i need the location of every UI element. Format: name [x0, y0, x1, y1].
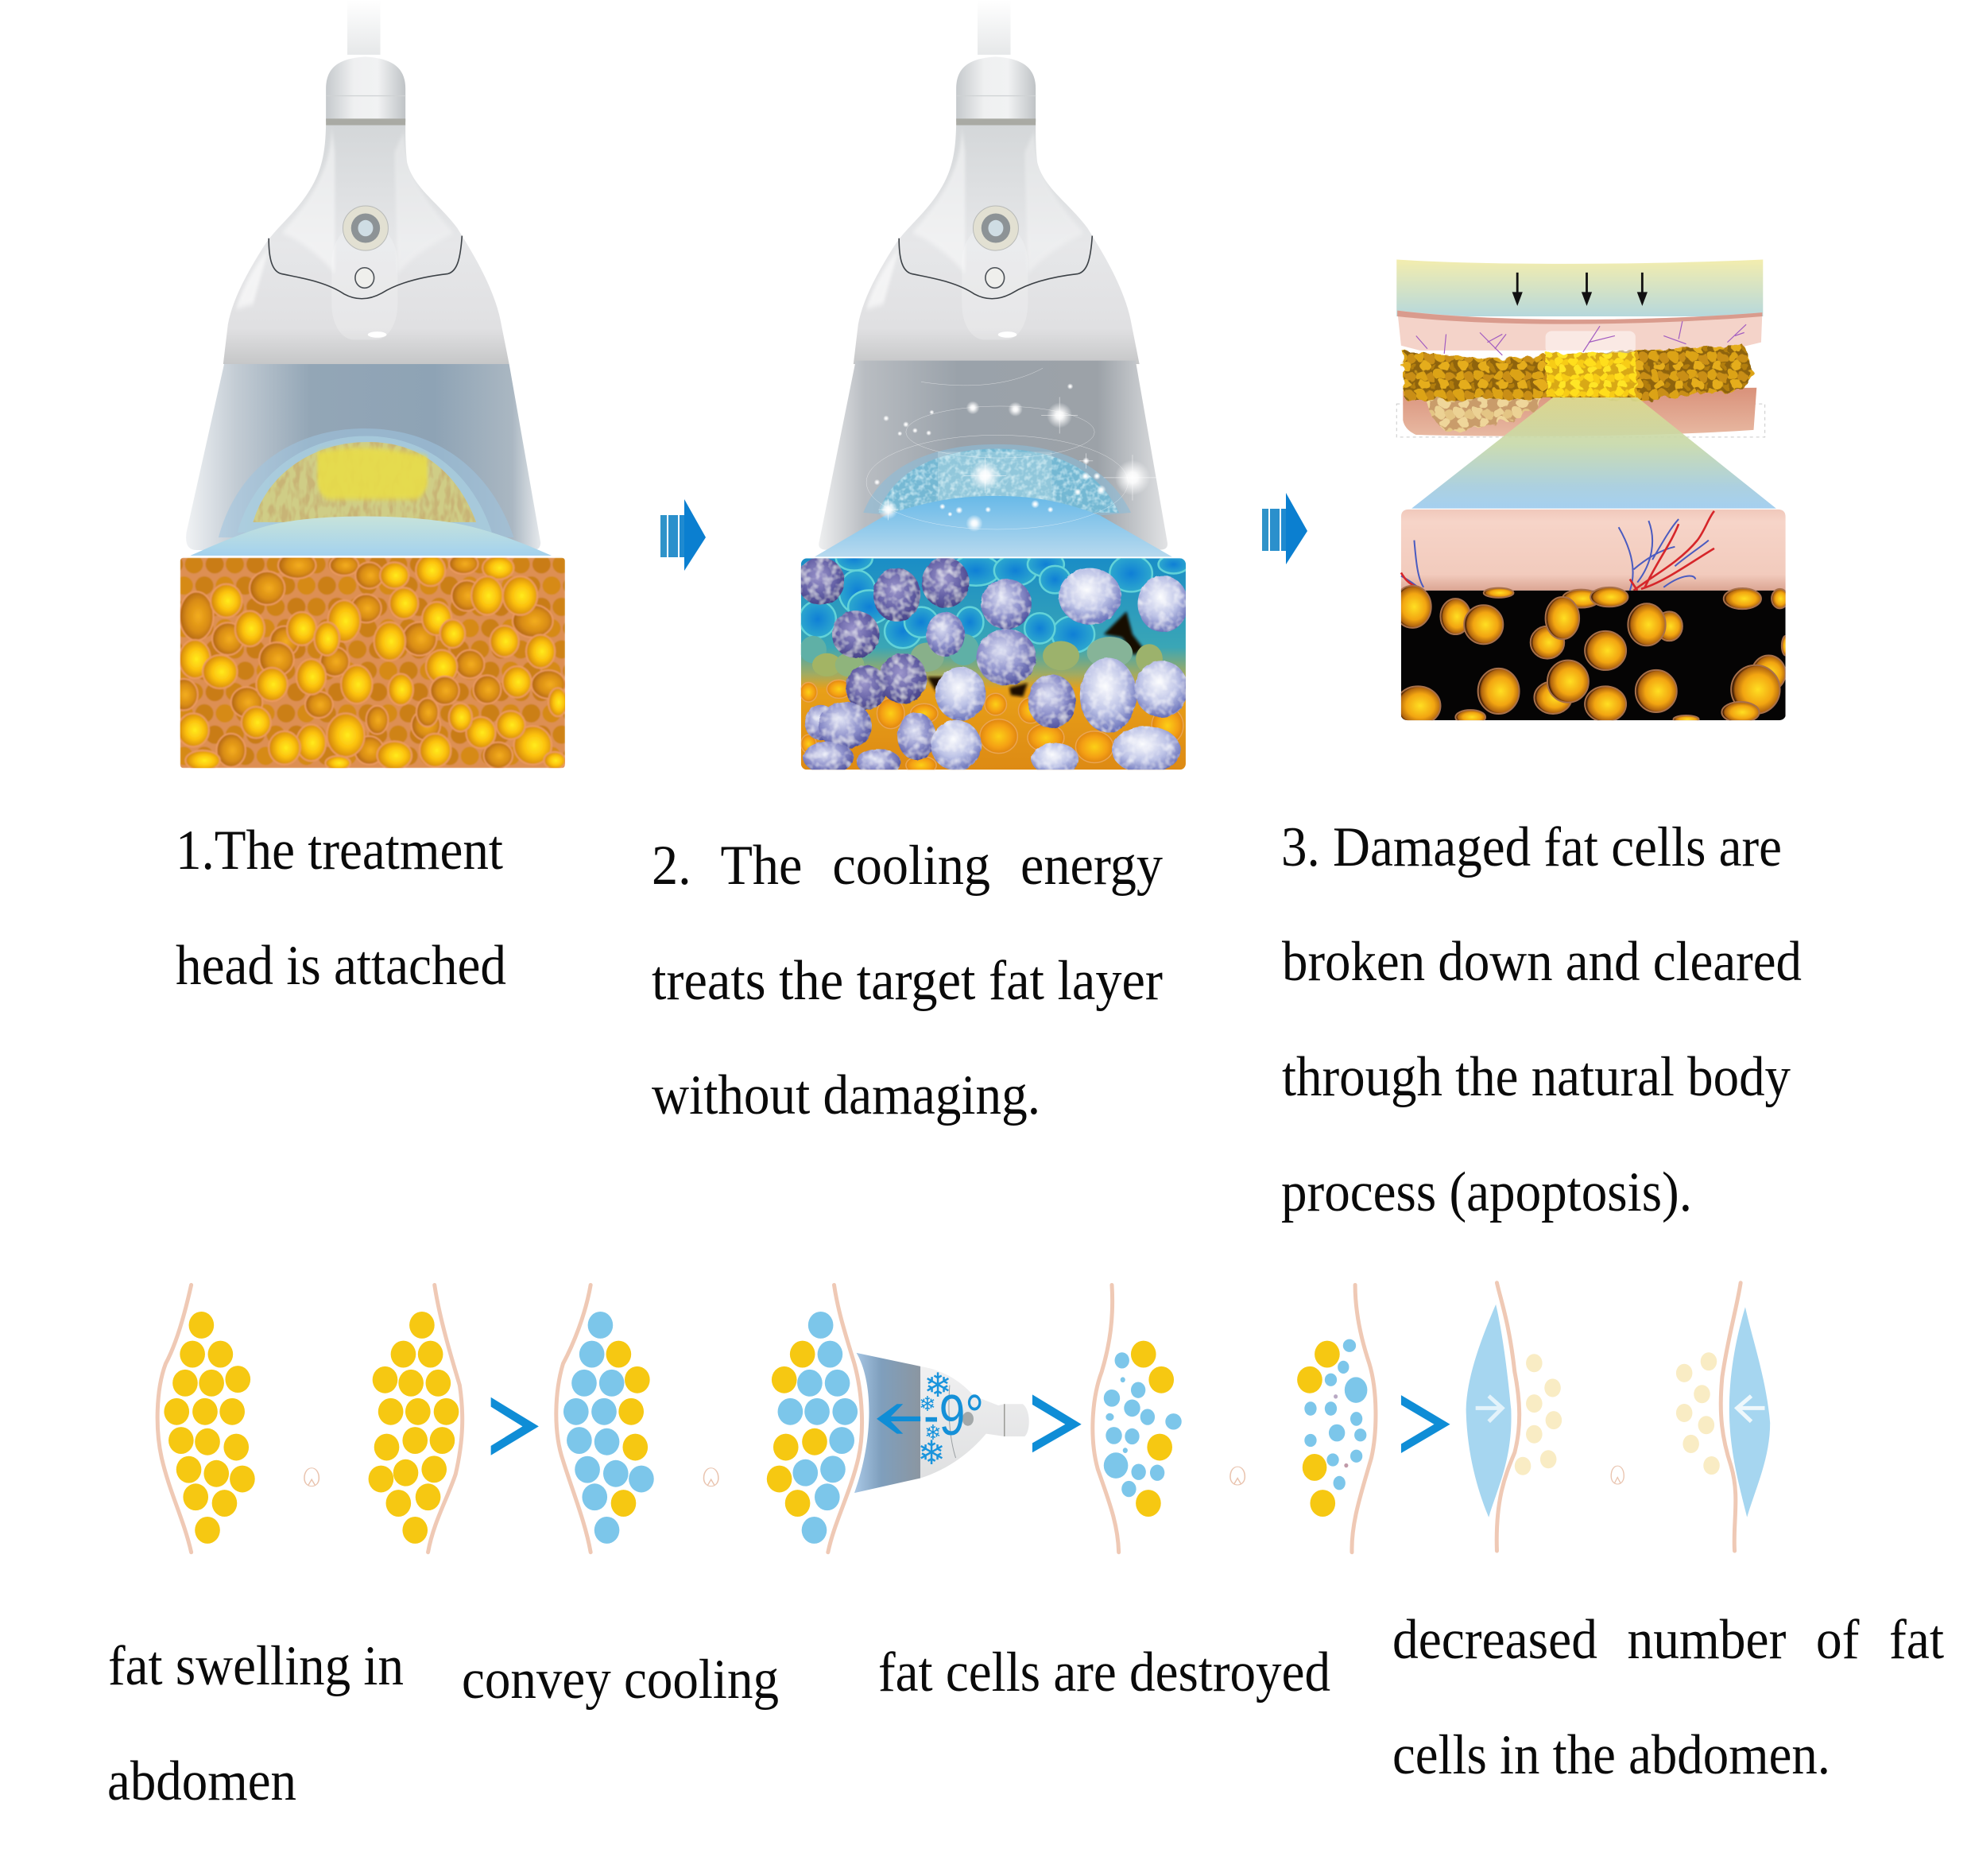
- text block: step 3 caption: through the natural body: [1282, 1046, 1791, 1108]
- text block: step 1 caption: [176, 820, 506, 997]
- lower tissue layer: [1396, 388, 1765, 437]
- text block: step 3 caption: process (apoptosis).: [1281, 1161, 1692, 1223]
- skin line and fat cells, back view: [369, 1285, 463, 1552]
- text block: step 2 caption: without damaging.: [652, 1064, 1040, 1126]
- text block: fat cells destroyed caption: fat cells are destroyed: [878, 1642, 1330, 1704]
- blood vessels: [1401, 511, 1714, 591]
- device: treatment head: [223, 0, 509, 364]
- treated area highlight: [1546, 331, 1636, 397]
- small blood vessels: [1416, 321, 1746, 355]
- icon: body marker: [304, 1468, 319, 1486]
- arrow: chevron 3: [1401, 1395, 1450, 1453]
- panel: cooling applied and destroyed cells: [767, 1285, 1376, 1552]
- fat reduced, back view: [1676, 1283, 1770, 1551]
- text block: step 2 caption: [652, 835, 1163, 1126]
- text block: step 3 caption: broken down and cleared: [1282, 931, 1802, 993]
- text block: fat swelling caption: [107, 1635, 404, 1812]
- cooling cup: [186, 364, 540, 550]
- icon: body marker: [704, 1468, 718, 1486]
- device: treatment head: [854, 0, 1140, 364]
- cooling band: [1396, 260, 1763, 316]
- zoom funnel: [1411, 397, 1776, 509]
- text block: convey cooling caption: convey cooling: [462, 1649, 779, 1711]
- skin line and shrinking cells: [1093, 1285, 1182, 1552]
- device: horizontal treatment head: [854, 1353, 1029, 1493]
- text block: step 1 caption: 1.The treatment: [176, 820, 503, 882]
- panel: step 2 handpiece illustration: [797, 0, 1189, 775]
- icons: snowflakes: ❄: [924, 1421, 942, 1445]
- panel: fat swelling diagrams: [157, 1285, 718, 1552]
- text block: step 2 caption: treats the target fat layer: [652, 950, 1163, 1012]
- arrow: step 2 to step 3: [1262, 493, 1307, 564]
- frozen fat cell block: [797, 546, 1189, 775]
- magnified skin: [1401, 510, 1786, 591]
- panel: step 1 handpiece illustration: [170, 0, 567, 770]
- arrow: chevron 2: [1032, 1394, 1082, 1452]
- icon: body marker: [1611, 1466, 1624, 1484]
- fat reduced, front view: [1466, 1283, 1562, 1551]
- skin line and cooled fat cells with device: [767, 1285, 862, 1552]
- text block: decreased fat caption: cells in the abdomen.: [1392, 1724, 1830, 1786]
- text block: step 1 caption: head is attached: [176, 935, 506, 997]
- panel: step 3 skin cross-section and fat cells: [1393, 260, 1789, 725]
- text block: fat swelling caption: fat swelling in: [108, 1635, 404, 1697]
- icon: body marker: [1230, 1467, 1245, 1485]
- panel: reduced fat diagrams: [1401, 1283, 1770, 1551]
- text block: fat swelling caption: abdomen: [107, 1750, 296, 1812]
- upper skin layer: [1397, 311, 1762, 351]
- cooling energy dome with sparkles: [815, 368, 1172, 556]
- icons: snowflakes: ❄: [919, 1393, 936, 1417]
- skin line and cooled fat cells: [556, 1285, 654, 1552]
- pressure arrows: [1512, 273, 1648, 306]
- fat cell block: [170, 552, 567, 770]
- text block: step 2 caption: 2. The cooling energy: [652, 835, 1163, 897]
- icons: snowflakes: ❄: [917, 1433, 946, 1472]
- text block: step 3 caption: 3. Damaged fat cells are: [1281, 816, 1782, 878]
- treated fat dome: [190, 428, 552, 556]
- fat layer: [1402, 345, 1753, 401]
- icons: snowflakes: [917, 1366, 952, 1472]
- magnified fat cells on black: [1393, 586, 1789, 725]
- skin line and destroyed cells: [1297, 1285, 1376, 1552]
- text block: decreased fat caption: [1392, 1609, 1944, 1786]
- text block: step 3 caption: [1281, 816, 1802, 1223]
- icon: cold arrow: [877, 1404, 920, 1434]
- arrow: step 1 to step 2: [660, 499, 706, 571]
- temperature label: -9°: [924, 1384, 984, 1448]
- skin line and fat cells, front view: [157, 1285, 255, 1552]
- cooling cup: [819, 361, 1167, 550]
- arrow: chevron 1: [491, 1397, 539, 1455]
- icons: snowflakes: ❄: [924, 1366, 952, 1405]
